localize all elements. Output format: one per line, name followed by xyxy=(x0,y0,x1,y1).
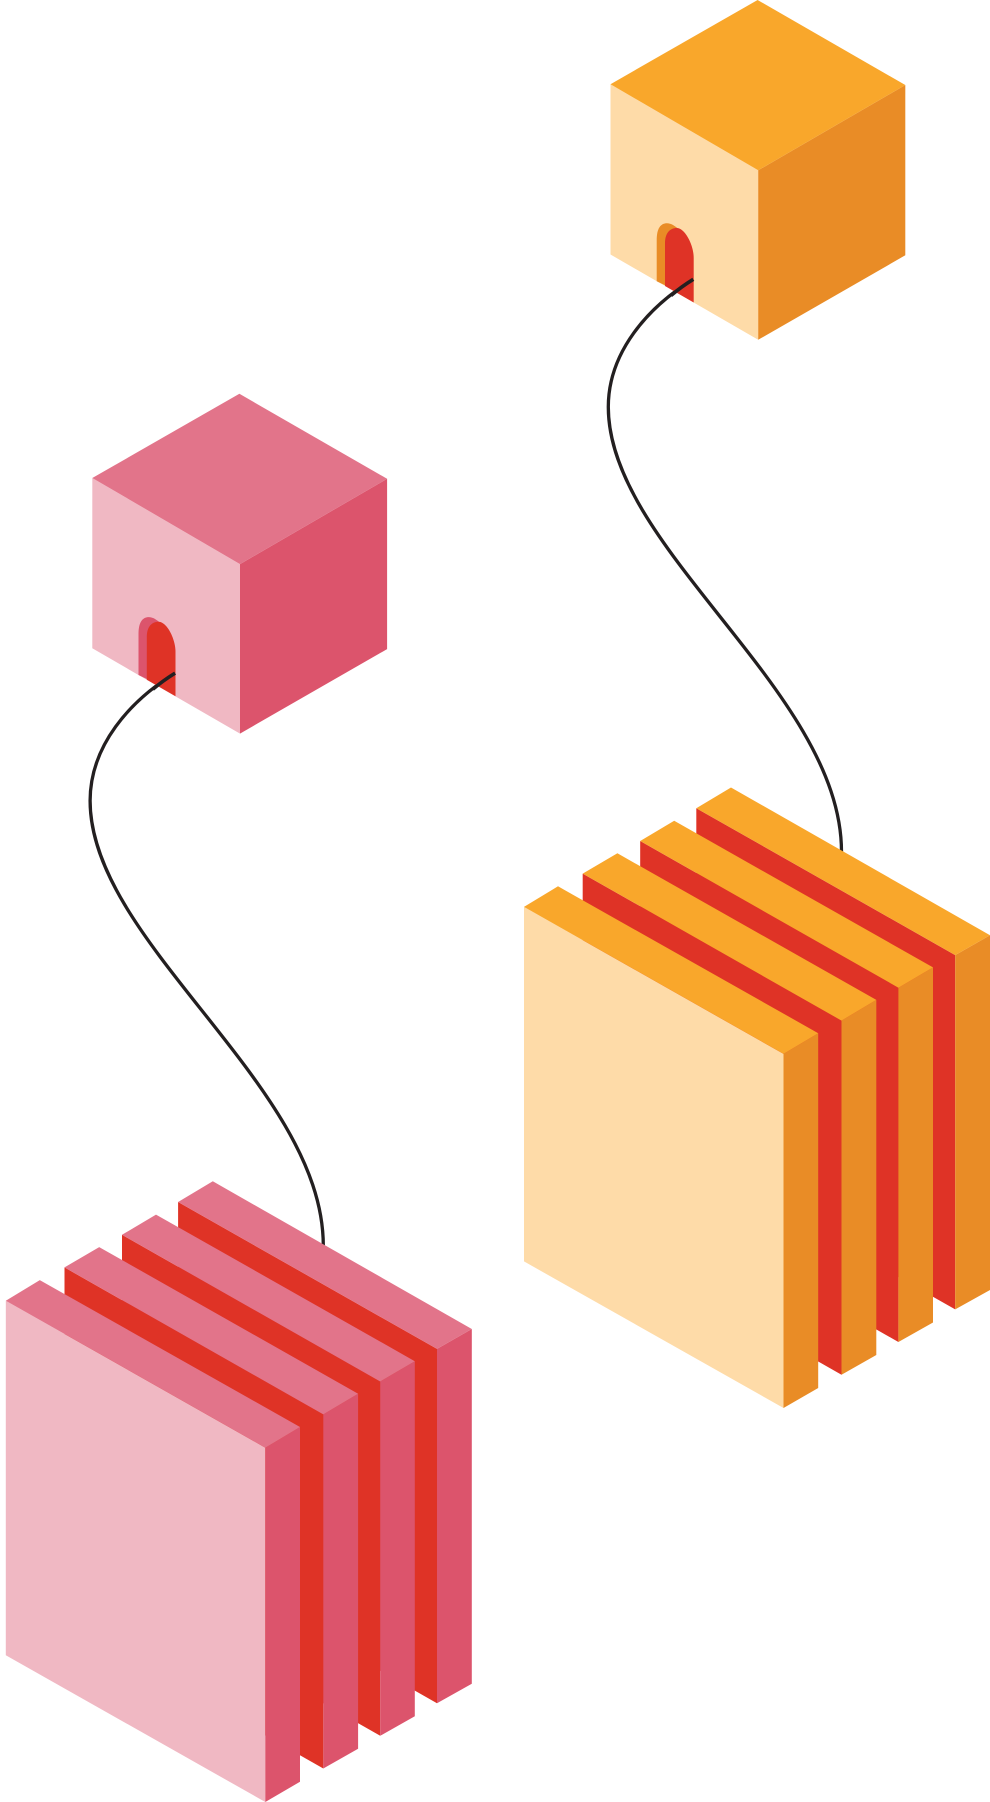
orange plate 3 xyxy=(640,821,933,1342)
door opening xyxy=(147,622,176,696)
orange group: house, cable, stack xyxy=(524,0,990,1408)
orange line end in doorway xyxy=(671,279,693,296)
orange plate 1 front xyxy=(524,886,818,1408)
pink line end in doorway xyxy=(153,673,175,689)
pink plate 4 xyxy=(178,1181,472,1703)
house roof xyxy=(92,394,387,564)
house right wall xyxy=(758,85,905,340)
orange plate 4 xyxy=(696,788,990,1309)
house left wall xyxy=(92,478,240,734)
pink house xyxy=(92,394,387,734)
pink plate 3 xyxy=(122,1215,415,1736)
pink connector line xyxy=(90,673,323,1246)
orange plate 2 xyxy=(583,853,876,1375)
orange connector line xyxy=(608,279,842,852)
house right wall xyxy=(240,479,387,734)
door reveal xyxy=(138,617,161,686)
orange house xyxy=(610,0,905,340)
pink plate 2 xyxy=(64,1247,358,1768)
pink group: house, cable, stack xyxy=(6,394,472,1802)
door opening xyxy=(665,228,694,302)
pink plate 1 front xyxy=(6,1280,300,1802)
house left wall xyxy=(610,84,758,340)
house roof xyxy=(610,0,905,170)
door reveal xyxy=(657,223,679,292)
